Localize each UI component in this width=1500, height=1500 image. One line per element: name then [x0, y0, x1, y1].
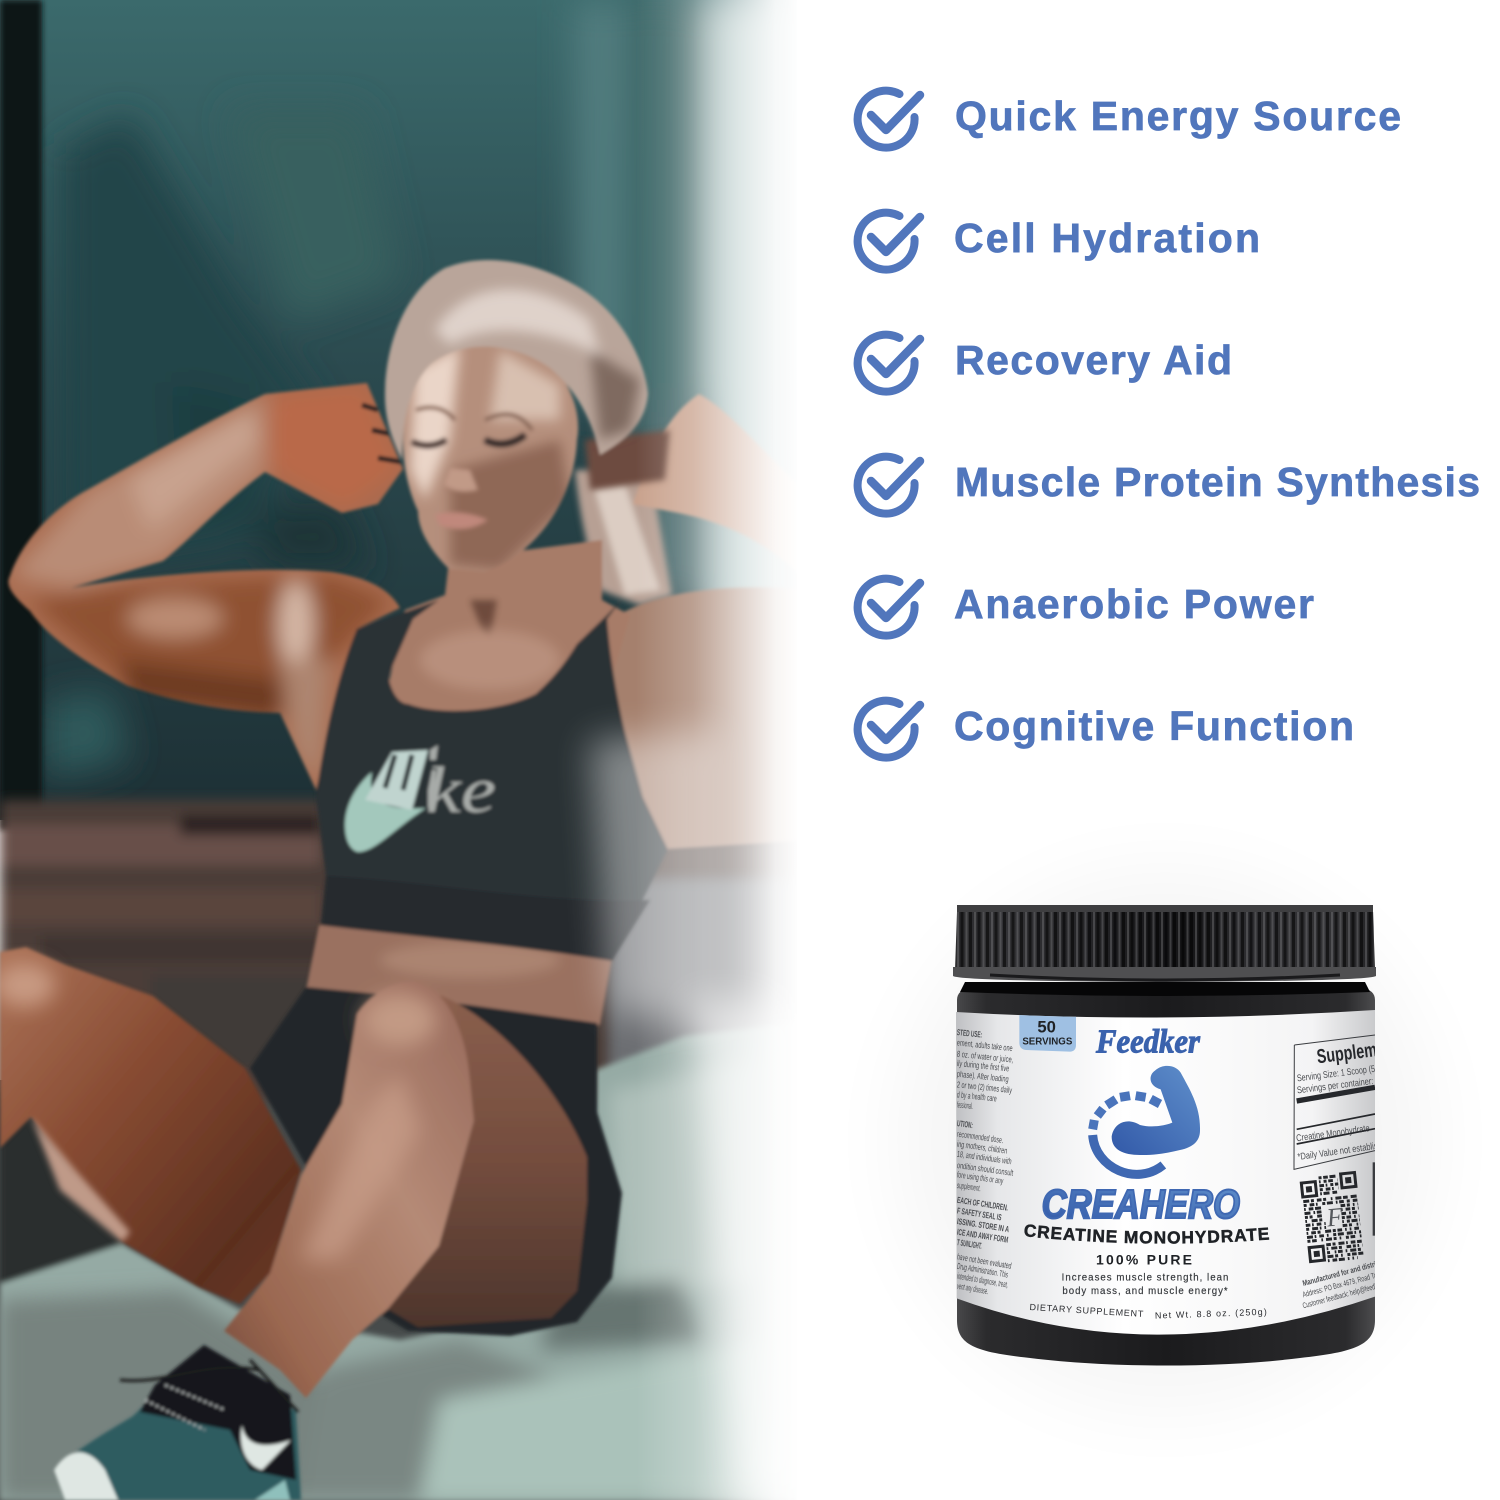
manufacturer text: Address: PO Box 4679, Road Town — [1302, 1269, 1384, 1299]
neck and chest — [386, 539, 625, 714]
product label — [956, 1010, 1375, 1335]
purity line: 100% PURE — [1096, 1251, 1192, 1267]
benefit: Muscle Protein Synthesis — [858, 457, 1480, 514]
hair top — [385, 260, 648, 460]
shorts — [250, 987, 622, 1336]
servings badge: 50 — [1037, 1017, 1056, 1036]
supplement facts panel — [1294, 1035, 1400, 1169]
sports bra — [316, 600, 666, 902]
directions text: have not been evaluated — [956, 1251, 1012, 1271]
manufacturer text: Customer feedback: help@feedker.com — [1302, 1277, 1394, 1310]
directions text: ement, adults take one — [956, 1037, 1013, 1053]
directions text: F SAFETY SEAL IS — [956, 1205, 1002, 1222]
photo: woman doing sit-ups — [0, 0, 820, 1500]
directions text: UTION: — [956, 1118, 974, 1130]
QR code: F — [1324, 1202, 1345, 1233]
directions text: supplement. — [956, 1180, 982, 1193]
benefit: Muscle Protein Synthesis: Muscle Protein Synthesis — [955, 459, 1480, 505]
supplement facts panel: Supplement — [1316, 1036, 1400, 1068]
supplement facts panel: Servings per container: 50 — [1296, 1075, 1384, 1096]
face — [400, 344, 580, 569]
directions text: fore using this or any — [956, 1169, 1004, 1186]
claim: body mass, and muscle energy* — [1062, 1286, 1228, 1297]
figure: woman — [0, 260, 815, 1500]
manufacturer text: Manufactured for and distributed by — [1302, 1253, 1401, 1288]
benefit: Quick Energy Source — [858, 91, 1401, 148]
jar neck — [960, 982, 1370, 996]
directions text: STED USE: — [956, 1027, 983, 1040]
supplement facts panel: Creatine Monohydrate — [1296, 1123, 1370, 1144]
directions text: 2 or two (2) times daily — [956, 1079, 1013, 1095]
directions text: T SUNLIGHT. — [956, 1237, 983, 1251]
white fade — [590, 0, 812, 1500]
claim — [1062, 1273, 1228, 1297]
directions text: recommended dose. — [956, 1129, 1004, 1145]
servings badge: SERVINGS — [1022, 1037, 1073, 1048]
benefit: Cognitive Function: Cognitive Function — [954, 703, 1354, 749]
jar lid — [953, 905, 1376, 982]
benefits list — [858, 91, 1480, 758]
far thigh — [0, 947, 301, 1304]
directions text: ing mothers, children — [956, 1139, 1008, 1156]
directions text: 18, and individuals with — [956, 1149, 1012, 1166]
benefit: Anaerobic Power — [858, 579, 1314, 636]
jar body — [957, 988, 1375, 1366]
directions text: ily during the first five — [956, 1058, 1010, 1074]
product type: CREATINE MONOHYDRATE — [1024, 1224, 1270, 1244]
directions text: vent any disease. — [956, 1281, 989, 1296]
footer text — [1030, 1304, 1266, 1319]
product name: CREAHERO — [1042, 1181, 1240, 1227]
manufacturer text — [1302, 1253, 1401, 1310]
stomach — [304, 925, 612, 1025]
falling hair on right — [575, 470, 672, 605]
near calf — [388, 995, 587, 1327]
directions text: intended to diagnose, treat, — [956, 1271, 1009, 1290]
directions text: ICE AND AWAY FORM — [956, 1227, 1009, 1245]
brand name: Feedker — [1095, 1024, 1201, 1061]
directions text: EACH OF CHILDREN. — [956, 1195, 1009, 1213]
benefit: Cell Hydration — [858, 213, 1260, 270]
claim: Increases muscle strength, lean — [1062, 1273, 1228, 1284]
benefit: Quick Energy Source: Quick Energy Source — [955, 93, 1401, 139]
directions text: Drug Administration. This — [956, 1261, 1009, 1280]
product jar — [948, 905, 1382, 1366]
supplement facts panel: Serving Size: 1 Scoop (5g) — [1296, 1063, 1382, 1084]
bra logo: ke — [426, 754, 496, 827]
directions text: 8 oz. of water or juice, — [956, 1049, 1014, 1065]
servings badge — [1019, 1013, 1076, 1052]
near shin — [224, 981, 474, 1398]
muscle logo — [1093, 1066, 1200, 1174]
directions text: ondition should consult — [956, 1160, 1014, 1178]
left raised arm and hand — [0, 370, 420, 800]
footer text: Net Wt. 8.8 oz. (250g) — [1155, 1307, 1267, 1321]
directions text: ISSING. STORE IN A — [956, 1216, 1010, 1234]
footer text: DIETARY SUPPLEMENT — [1029, 1302, 1144, 1319]
directions text: fessional. — [956, 1099, 973, 1111]
benefit: Recovery Aid — [858, 335, 1232, 392]
directions text — [956, 1027, 1014, 1296]
benefit: Anaerobic Power: Anaerobic Power — [954, 581, 1314, 627]
benefit: Cognitive Function — [858, 701, 1354, 758]
right hand and arm — [634, 393, 762, 542]
shoe — [54, 1345, 301, 1500]
directions text: phase). After loading — [956, 1069, 1009, 1084]
QR code — [1301, 1172, 1364, 1263]
bra logo — [345, 745, 496, 852]
directions text: d by a health care — [956, 1089, 997, 1104]
benefit: Recovery Aid: Recovery Aid — [955, 337, 1232, 383]
supplement facts panel: *Daily Value not established — [1297, 1139, 1391, 1163]
benefit: Cell Hydration: Cell Hydration — [954, 215, 1260, 261]
gym background — [0, 0, 820, 1500]
